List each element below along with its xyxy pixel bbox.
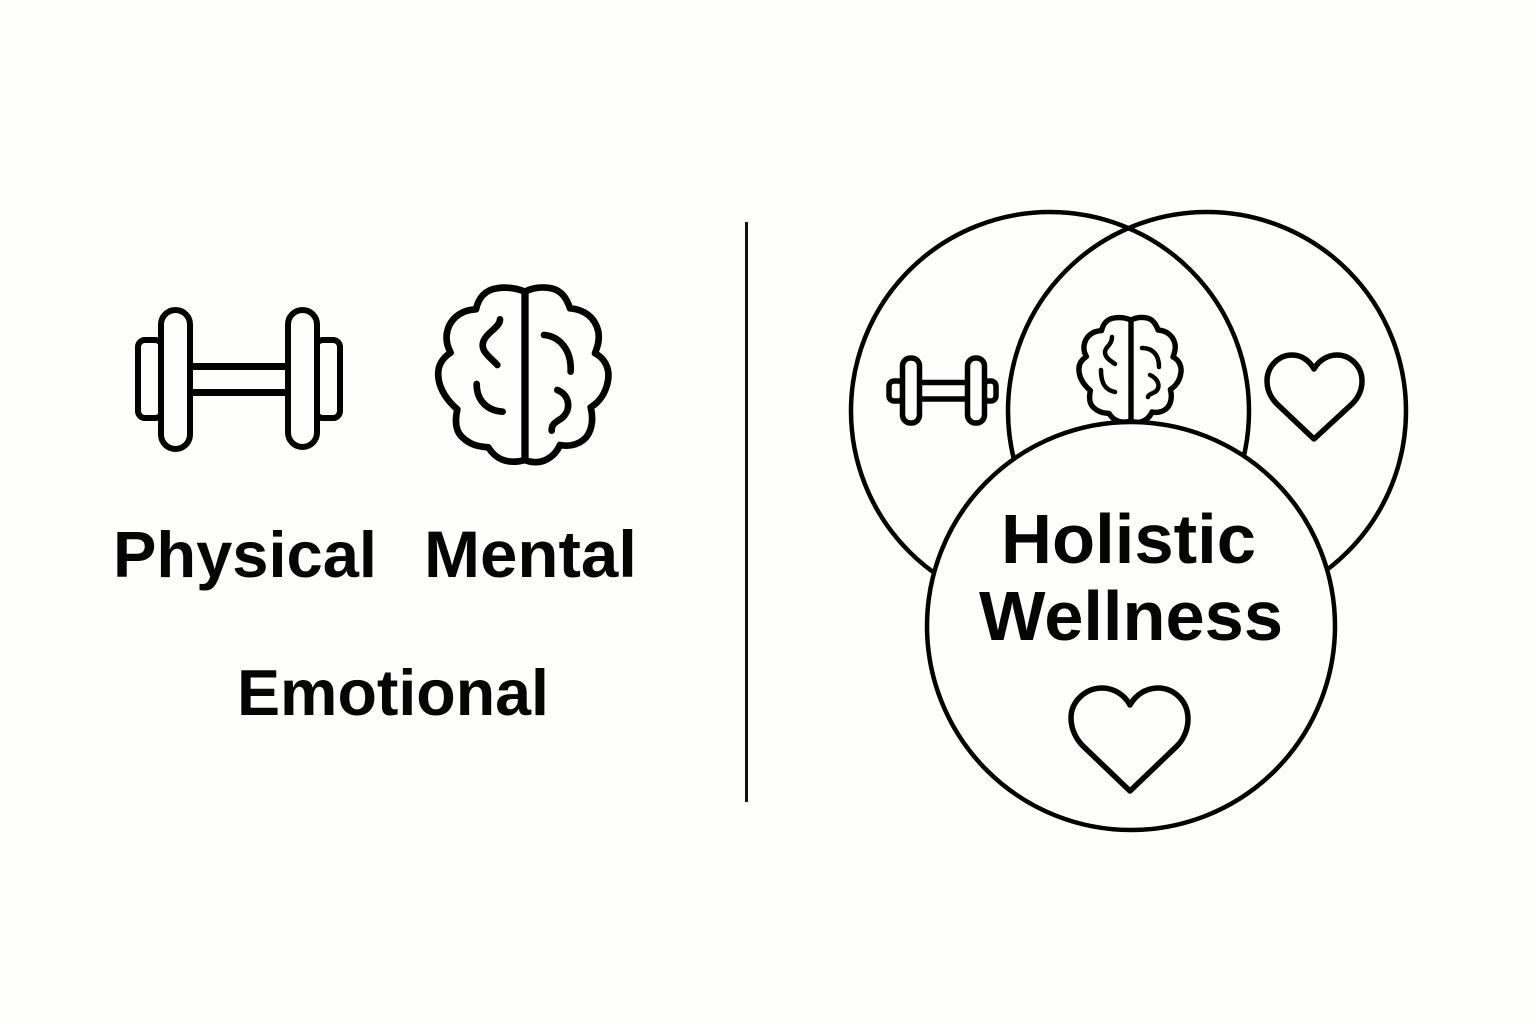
right circle: emotional (1008, 212, 1406, 610)
heading: Holistic Wellness (979, 500, 1283, 655)
icon: large heart (1071, 688, 1188, 791)
icon: small brain (1079, 317, 1181, 422)
panel: three wellness dimensions (113, 287, 637, 729)
icon: small dumbbell (889, 358, 996, 423)
divider (745, 222, 748, 802)
icon: large brain (438, 287, 608, 462)
bottom circle: holistic wellness (927, 422, 1335, 830)
panel: Venn diagram of holistic wellness (851, 212, 1406, 830)
heading: Holistic Wellness: Wellness (979, 577, 1283, 655)
label: Emotional: Emotional (237, 656, 549, 729)
left circle: physical (851, 212, 1249, 610)
heading: Holistic Wellness: Holistic (1001, 500, 1256, 578)
icon: large dumbbell (138, 310, 340, 449)
label: Mental: Mental (424, 517, 637, 591)
icon: small heart (1267, 355, 1362, 439)
label: Physical: Physical (113, 518, 377, 591)
